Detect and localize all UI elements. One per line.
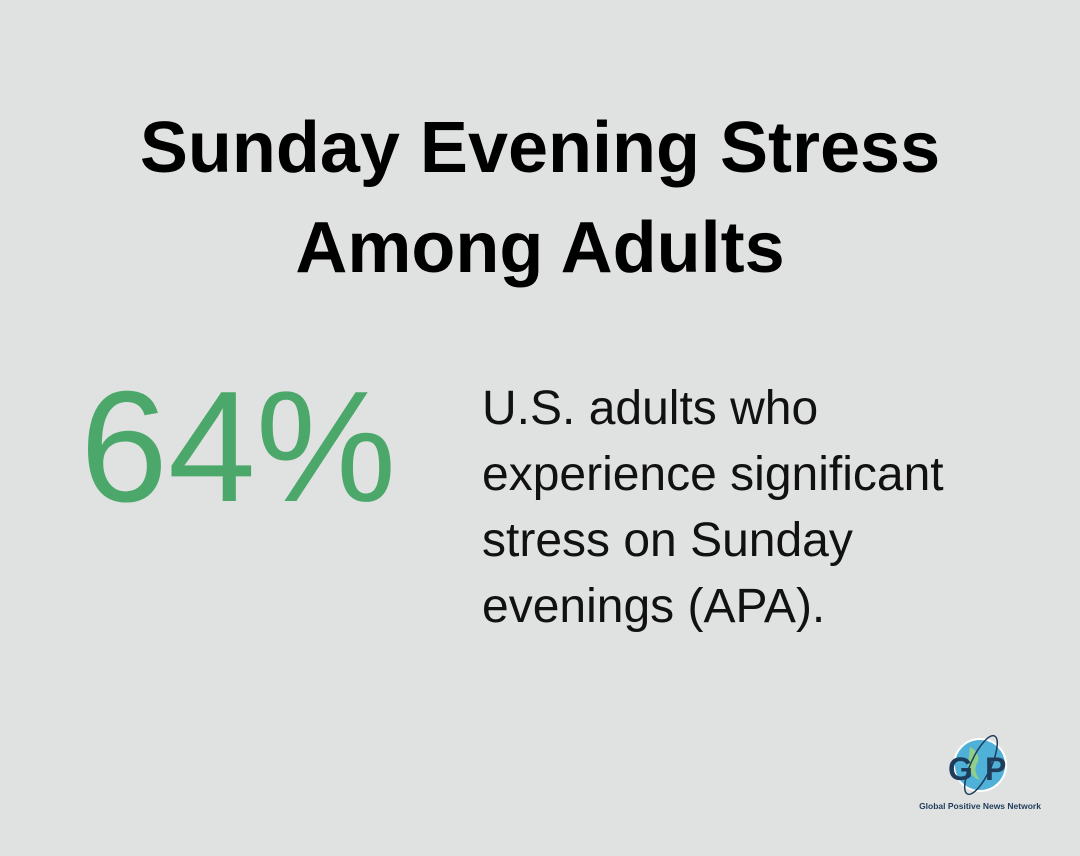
logo: Global Positive News Network: [919, 801, 1041, 811]
logo: G: [948, 751, 973, 787]
title: Among Adults: [295, 208, 785, 288]
description: stress on Sunday: [482, 514, 853, 567]
title: [140, 108, 940, 288]
logo: [919, 735, 1041, 811]
title: Sunday Evening Stress: [140, 108, 940, 188]
big stat: 64%: [80, 359, 396, 535]
logo: P: [985, 751, 1006, 787]
description: experience significant: [482, 448, 944, 501]
description: evenings (APA).: [482, 580, 825, 633]
description: [482, 382, 944, 633]
description: U.S. adults who: [482, 382, 818, 435]
